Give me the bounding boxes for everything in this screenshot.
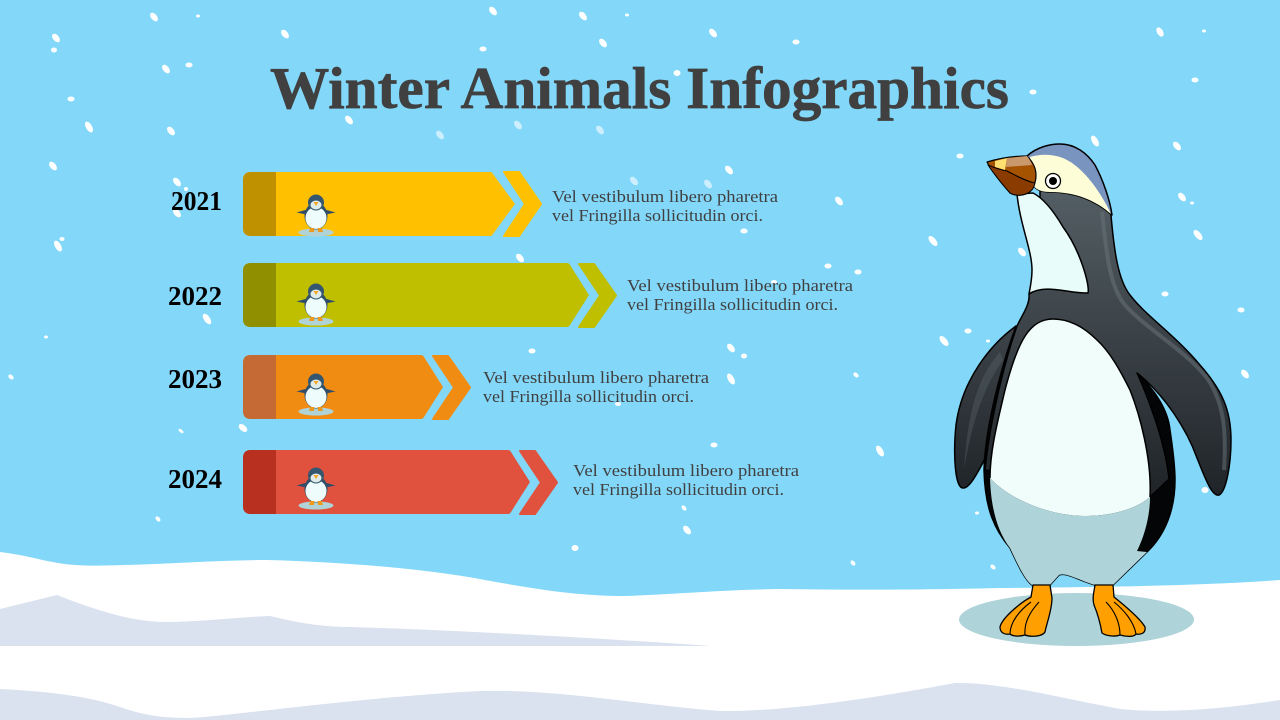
row 2024 (168, 450, 800, 514)
chevron 2021 (504, 172, 541, 236)
mini penguin 2022 (296, 284, 336, 326)
description 2021: Vel vestibulum libero pharetra (552, 187, 779, 206)
head cap (1027, 144, 1112, 215)
dark back and right flipper (985, 172, 1231, 497)
row 2022 (168, 263, 854, 327)
snow ground (0, 552, 1280, 720)
left flipper (955, 326, 1016, 488)
head cream face (1030, 155, 1111, 214)
chevron 2023 (433, 356, 470, 419)
year 2023: 2023 (168, 364, 222, 394)
mini penguin 2024 (296, 468, 336, 510)
black body silhouette (984, 326, 1175, 585)
year tab 2023 (243, 355, 276, 419)
description 2024: vel Fringilla sollicitudin orci. (573, 480, 784, 499)
large penguin illustration (955, 144, 1231, 646)
back highlight (1102, 212, 1225, 470)
arrow bar 2024 (243, 450, 530, 514)
description 2022: Vel vestibulum libero pharetra (627, 276, 854, 295)
year 2021: 2021 (171, 186, 222, 216)
year tab 2021 (243, 172, 276, 236)
chevron 2022 (579, 264, 616, 327)
description 2021: vel Fringilla sollicitudin orci. (552, 206, 763, 225)
row 2021 (171, 172, 779, 236)
description 2023: Vel vestibulum libero pharetra (483, 368, 710, 387)
belly (990, 319, 1150, 516)
arrow bar 2022 (243, 263, 589, 327)
chevron 2024 (520, 451, 557, 514)
snowflakes (7, 5, 1251, 570)
penguin ground shadow (959, 593, 1194, 646)
left foot (1000, 585, 1052, 636)
year tab 2022 (243, 263, 276, 327)
year 2024: 2024 (168, 464, 222, 494)
neck patch (1017, 193, 1088, 294)
belly lower shade (990, 478, 1150, 585)
year tab 2024 (243, 450, 276, 514)
belly outline (990, 319, 1150, 497)
eye (1046, 174, 1060, 188)
right foot (1093, 585, 1145, 636)
row 2023 (168, 355, 710, 419)
distant snow hill (0, 595, 710, 646)
beak (987, 156, 1036, 195)
year 2022: 2022 (168, 281, 222, 311)
mini penguin 2021 (296, 194, 336, 236)
description 2022: vel Fringilla sollicitudin orci. (627, 295, 838, 314)
description 2024: Vel vestibulum libero pharetra (573, 461, 800, 480)
mini penguin 2023 (296, 374, 336, 416)
description 2023: vel Fringilla sollicitudin orci. (483, 387, 694, 406)
flipper highlight (964, 352, 1003, 470)
title: Winter Animals Infographics (270, 55, 1009, 121)
arrow bar 2023 (243, 355, 443, 419)
arrow bar 2021 (243, 172, 515, 236)
foreground snow drift (0, 683, 1280, 720)
